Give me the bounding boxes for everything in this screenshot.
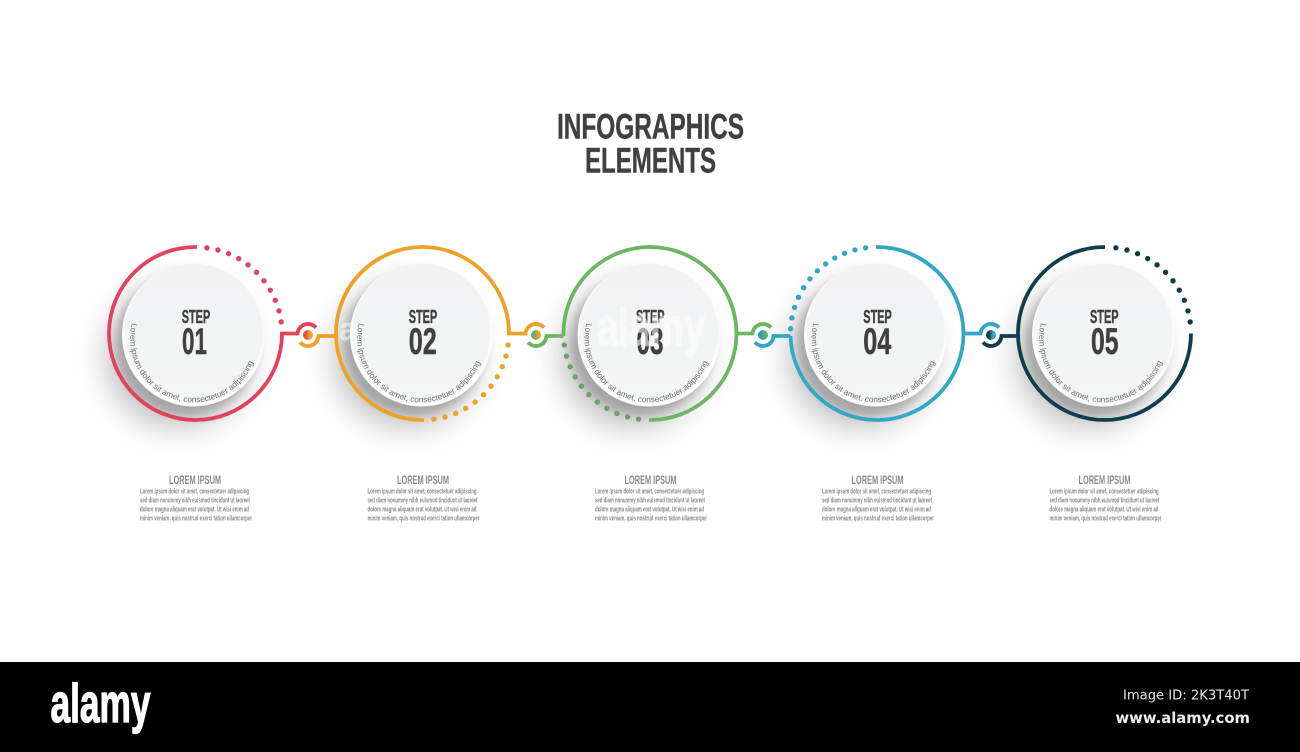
step number: 01 bbox=[182, 321, 207, 362]
description bbox=[368, 473, 480, 522]
ring: green dots bbox=[564, 345, 639, 419]
description: LOREM IPSUM bbox=[397, 473, 449, 487]
watermark: a bbox=[339, 311, 357, 347]
description: dolore magna aliquam erat volutpat. Ut wisi enim ad bbox=[1050, 506, 1158, 514]
description: Lorem ipsum dolor sit amet, consectetuer adipiscing bbox=[368, 488, 476, 496]
description: Lorem ipsum dolor sit amet, consectetuer adipiscing bbox=[822, 488, 931, 496]
watermark bbox=[339, 296, 705, 358]
curved text: Lorem ipsum dolor sit amet, consectetuer adipiscing bbox=[811, 324, 936, 402]
panel: step 4 bbox=[774, 245, 1000, 522]
step number: 04 bbox=[863, 321, 892, 362]
step number: 02 bbox=[409, 321, 437, 362]
watermark: alamy bbox=[597, 296, 705, 358]
ring: solid blue arc bbox=[790, 247, 999, 420]
description: Lorem ipsum dolor sit amet, consectetuer adipiscing bbox=[140, 488, 249, 496]
connector: step 1 to 2 bbox=[300, 330, 336, 346]
panel: step 3 bbox=[546, 245, 772, 522]
step label: STEP bbox=[863, 306, 892, 327]
ring: blue dots bbox=[791, 248, 866, 329]
disc bbox=[578, 264, 720, 406]
disc shadow bbox=[332, 273, 486, 430]
ring: navy dots bbox=[1116, 248, 1190, 322]
description: sed diam nonummy nibh euismod tincidunt ut laoreet bbox=[822, 498, 932, 504]
disc shadow bbox=[1014, 273, 1168, 430]
description: dolore magna aliquam erat volutpat. Ut wisi enim ad bbox=[822, 506, 931, 514]
curved text: Lorem ipsum dolor sit amet, consectetuer adipiscing bbox=[584, 324, 709, 402]
description bbox=[595, 473, 707, 522]
description: sed diam nonummy nibh euismod tincidunt ut laoreet bbox=[140, 498, 250, 504]
description: minim veniam, quis nostrud exerci tation ullamcorper bbox=[140, 516, 252, 522]
step label: STEP bbox=[182, 306, 210, 327]
description: minim veniam, quis nostrud exerci tation ullamcorper bbox=[595, 516, 707, 522]
ring: solid navy arc bbox=[1018, 247, 1191, 420]
description: sed diam nonummy nibh euismod tincidunt ut laoreet bbox=[1050, 498, 1160, 504]
disc shadow bbox=[786, 273, 940, 430]
step label: STEP bbox=[409, 306, 437, 327]
description: minim veniam, quis nostrud exerci tation ullamcorper bbox=[1050, 516, 1162, 522]
title bbox=[557, 108, 744, 180]
description: sed diam nonummy nibh euismod tincidunt ut laoreet bbox=[595, 498, 705, 504]
disc bbox=[122, 264, 265, 406]
ring: red dots bbox=[207, 248, 281, 322]
footer url: www.alamy.com bbox=[1116, 709, 1250, 727]
ring: solid green arc bbox=[563, 247, 771, 420]
step label: STEP bbox=[636, 306, 664, 327]
description bbox=[822, 473, 934, 522]
description: minim veniam, quis nostrud exerci tation ullamcorper bbox=[368, 516, 480, 522]
curved text: Lorem ipsum dolor sit amet, consectetuer adipiscing bbox=[356, 324, 482, 402]
description: LOREM IPSUM bbox=[169, 473, 221, 487]
description: dolore magna aliquam erat volutpat. Ut wisi enim ad bbox=[140, 506, 249, 514]
disc bbox=[1032, 264, 1175, 406]
disc shadow bbox=[104, 273, 258, 430]
step number: 03 bbox=[636, 321, 664, 362]
description: dolore magna aliquam erat volutpat. Ut wisi enim ad bbox=[368, 506, 476, 514]
step number: 05 bbox=[1091, 321, 1118, 362]
disc bbox=[350, 264, 493, 406]
description: sed diam nonummy nibh euismod tincidunt ut laoreet bbox=[368, 498, 478, 504]
step label: STEP bbox=[1090, 306, 1118, 327]
disc shadow bbox=[559, 273, 713, 430]
panel: step 5 bbox=[1002, 245, 1193, 522]
title: INFOGRAPHICS bbox=[557, 108, 744, 146]
connector: step 4 to 5 bbox=[983, 330, 1018, 346]
ring: solid orange arc bbox=[336, 247, 544, 420]
description: LOREM IPSUM bbox=[852, 473, 904, 487]
description: LOREM IPSUM bbox=[624, 473, 676, 487]
description: dolore magna aliquam erat volutpat. Ut wisi enim ad bbox=[595, 506, 704, 514]
description bbox=[140, 473, 252, 522]
panel: step 2 bbox=[320, 245, 546, 522]
description: minim veniam, quis nostrud exerci tation ullamcorper bbox=[822, 516, 934, 522]
description bbox=[1050, 473, 1162, 522]
connector: step 3 to 4 bbox=[755, 330, 790, 346]
description: Lorem ipsum dolor sit amet, consectetuer adipiscing bbox=[595, 488, 704, 496]
disc bbox=[804, 264, 947, 406]
connector: step 2 to 3 bbox=[528, 330, 564, 346]
ring: orange dots bbox=[434, 345, 508, 419]
description: LOREM IPSUM bbox=[1078, 473, 1130, 487]
description: Lorem ipsum dolor sit amet, consectetuer adipiscing bbox=[1050, 488, 1158, 496]
curved text: Lorem ipsum dolor sit amet, consectetuer adipiscing bbox=[1038, 324, 1164, 402]
footer bar bbox=[0, 662, 1300, 752]
curved text: Lorem ipsum dolor sit amet, consectetuer adipiscing bbox=[130, 324, 254, 402]
footer logo: alamy bbox=[50, 672, 151, 734]
panel: step 1 bbox=[92, 245, 318, 522]
title: ELEMENTS bbox=[585, 142, 716, 180]
ring: solid red arc bbox=[109, 247, 316, 420]
footer image id: Image ID: 2K3T40T bbox=[1123, 688, 1250, 704]
